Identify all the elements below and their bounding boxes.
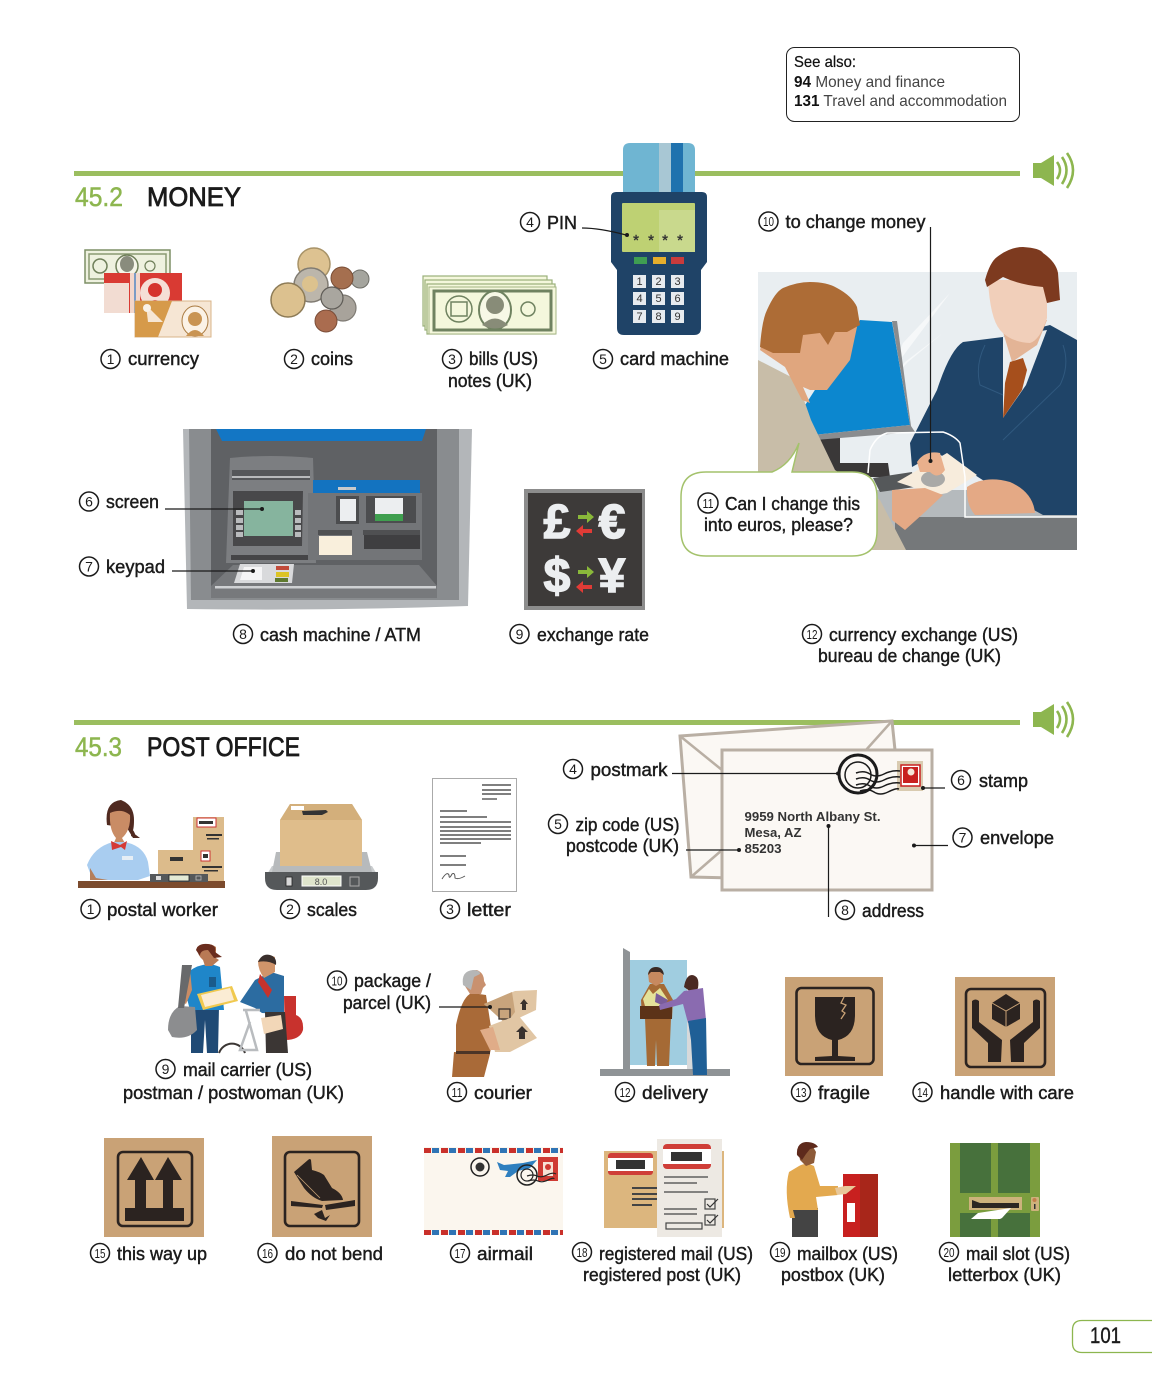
label: currency: 1	[107, 351, 115, 367]
label: courier	[448, 1082, 532, 1103]
label: airmail: airmail	[477, 1243, 533, 1264]
label: address with leader: 8	[841, 902, 849, 918]
label: zip code with leader	[548, 814, 741, 856]
label: PIN with leader: PIN	[547, 212, 577, 233]
label: bills / notes: notes (UK)	[448, 370, 532, 391]
label: registered mail / post: 18	[576, 1245, 588, 1260]
label: card machine: card machine	[620, 348, 729, 369]
label: PIN with leader	[520, 212, 629, 237]
label: mail carrier / postman	[123, 1059, 344, 1103]
label: zip code with leader: zip code (US)	[576, 814, 680, 835]
label: keypad with leader: 7	[85, 558, 93, 574]
label: package with leader: parcel (UK)	[343, 992, 431, 1013]
illustration: exchange rate sign	[524, 489, 645, 610]
heading: post office: 45.3	[75, 732, 122, 762]
illustration: card machine: 4	[636, 293, 643, 305]
label: this way up: 15	[94, 1246, 106, 1261]
page number: 101	[1090, 1323, 1121, 1348]
label: registered mail / post	[572, 1242, 753, 1285]
speech bubble	[681, 443, 877, 556]
illustration: exchange rate sign: $	[544, 550, 571, 603]
label: fragile: 13	[796, 1085, 806, 1100]
illustration: card machine: 5	[655, 293, 662, 305]
sign: fragile	[785, 977, 883, 1076]
label: exchange rate: 9	[516, 626, 524, 642]
heading: post office	[75, 732, 300, 762]
illustration: card machine: *	[648, 232, 654, 249]
label: mail carrier / postman: mail carrier (US)	[183, 1059, 312, 1080]
label: zip code with leader: postcode (UK)	[566, 835, 679, 856]
illustration: letter	[432, 778, 516, 892]
label: mail slot / letterbox: 20	[944, 1245, 954, 1260]
label: mail carrier / postman: 9	[162, 1061, 170, 1077]
label: handle with care: handle with care	[940, 1082, 1074, 1103]
see also box: See also:	[794, 54, 856, 71]
illustration: courier with parcels	[452, 970, 537, 1077]
label: envelope with leader: 7	[959, 830, 967, 846]
illustration: card machine: 1	[636, 276, 643, 288]
sign: this way up	[104, 1138, 204, 1237]
illustration: card machine: 7	[636, 311, 643, 323]
label: PIN with leader: 4	[526, 214, 534, 230]
section rule: post office	[74, 720, 1020, 725]
label: courier: 11	[452, 1085, 462, 1100]
stamp	[897, 761, 923, 791]
label: screen with leader: screen	[106, 491, 159, 512]
label: airmail	[450, 1243, 533, 1264]
label: cash machine: cash machine / ATM	[260, 624, 421, 645]
label: scales: scales	[307, 899, 357, 920]
icon: audio speaker	[1033, 153, 1073, 188]
see also box: 94 Money and finance	[794, 74, 945, 91]
illustration: card machine: 3	[674, 276, 681, 288]
illustration: coins	[271, 248, 369, 332]
address text: 85203	[744, 841, 782, 856]
label: cash machine: 8	[239, 626, 247, 642]
sign: do not bend	[272, 1136, 372, 1237]
label: postal worker: postal worker	[107, 899, 218, 920]
label: handle with care: 14	[917, 1085, 928, 1100]
label: package with leader	[328, 970, 492, 1013]
label: letter	[440, 899, 511, 920]
address text: 9959 North Albany St.	[744, 809, 880, 824]
label: mail slot / letterbox	[940, 1242, 1070, 1285]
illustration: exchange rate sign: €	[599, 496, 625, 549]
label: coins: 2	[290, 351, 298, 367]
label: package with leader: 10	[332, 974, 342, 988]
label: mail slot / letterbox: letterbox (UK)	[948, 1264, 1061, 1285]
label: courier: courier	[474, 1082, 532, 1103]
speech bubble: 11	[702, 496, 714, 511]
label: mailbox / postbox: mailbox (US)	[797, 1243, 898, 1264]
illustration: delivery	[600, 948, 730, 1076]
label: to change money: to change money	[786, 211, 926, 232]
illustration: card machine	[611, 143, 707, 335]
label: scales: 2	[286, 901, 294, 917]
label: delivery: 12	[620, 1085, 630, 1100]
illustration: envelope	[680, 721, 932, 890]
label: letter: letter	[467, 899, 511, 920]
speech bubble: into euros, please?	[704, 514, 853, 535]
label: postmark with leader: postmark	[590, 759, 668, 780]
illustration: exchange rate sign: ¥	[599, 550, 626, 603]
label: envelope with leader: envelope	[980, 827, 1054, 848]
label: to change money: 10	[763, 214, 774, 229]
label: fragile: fragile	[818, 1082, 870, 1103]
label: mailbox / postbox	[770, 1242, 898, 1285]
label: currency exchange: currency exchange (US)	[829, 624, 1018, 645]
illustration: airmail	[424, 1147, 563, 1235]
label: this way up: this way up	[117, 1243, 207, 1264]
label: address with leader	[826, 824, 924, 921]
heading: money: 45.2	[75, 182, 123, 212]
illustration: currency exchange counter	[758, 247, 1077, 550]
label: zip code with leader: 5	[554, 816, 562, 832]
illustration: card machine: 8	[655, 311, 662, 323]
label: stamp with leader: 6	[957, 772, 965, 788]
address text	[744, 809, 880, 856]
heading: money	[75, 182, 241, 212]
section rule: money	[74, 171, 1020, 176]
label: postal worker: 1	[87, 901, 95, 917]
label: delivery	[616, 1082, 709, 1103]
label: mail carrier / postman: postman / postwoman (UK)	[123, 1082, 344, 1103]
label: card machine: 5	[599, 351, 607, 367]
label: letter: 3	[446, 901, 454, 917]
label: coins	[284, 348, 353, 369]
label: bills / notes: bills (US)	[469, 348, 538, 369]
illustration: card machine: *	[662, 232, 668, 249]
illustration: scales	[265, 804, 378, 890]
see also box	[786, 48, 1020, 122]
section: post office	[74, 702, 1074, 1285]
illustration: currency notes	[85, 250, 211, 337]
illustration: scales: 8.0	[315, 877, 327, 887]
label: delivery: delivery	[642, 1082, 709, 1103]
illustration: card machine: *	[633, 232, 639, 249]
label: bills / notes: 3	[448, 351, 456, 367]
label: coins: coins	[311, 348, 353, 369]
illustration: card machine: 6	[674, 293, 681, 305]
label: registered mail / post: registered mail (US)	[599, 1243, 753, 1264]
label: package with leader: package /	[354, 970, 432, 991]
label: airmail: 17	[454, 1246, 466, 1261]
label: mailbox / postbox: 19	[774, 1245, 786, 1260]
illustration: card machine: *	[677, 232, 683, 249]
label: currency exchange	[802, 624, 1018, 666]
see also box: 131 Travel and accommodation	[794, 93, 1007, 110]
illustration: card machine: 9	[674, 311, 681, 323]
label: currency exchange: bureau de change (UK)	[818, 645, 1001, 666]
illustration: exchange rate sign: £	[544, 496, 571, 549]
label: stamp with leader	[921, 770, 1028, 791]
leader: to change money	[928, 227, 932, 463]
section: money	[74, 143, 1077, 666]
illustration: mail carriers	[168, 944, 303, 1053]
label: exchange rate: exchange rate	[537, 624, 649, 645]
illustration: mailbox	[787, 1142, 878, 1237]
label: keypad with leader	[80, 556, 255, 577]
speech bubble: Can I change this	[725, 493, 860, 514]
label: stamp with leader: stamp	[979, 770, 1028, 791]
label: currency exchange: 12	[806, 627, 818, 642]
sign: handle with care	[955, 977, 1055, 1076]
label: screen with leader	[80, 491, 264, 512]
icon: audio speaker	[1033, 702, 1073, 737]
page number	[1072, 1320, 1152, 1352]
label: envelope with leader	[912, 827, 1054, 848]
heading: post office: POST OFFICE	[147, 732, 300, 762]
illustration: card machine: 2	[655, 276, 662, 288]
illustration: registered mail	[604, 1139, 724, 1237]
illustration: postal worker	[78, 800, 225, 888]
label: keypad with leader: keypad	[106, 556, 165, 577]
label: do not bend: do not bend	[285, 1243, 383, 1264]
label: registered mail / post: registered post (UK)	[583, 1264, 741, 1285]
label: screen with leader: 6	[85, 494, 93, 510]
illustration: cash machine	[183, 429, 472, 610]
label: bills / notes	[442, 348, 538, 391]
illustration: bills	[423, 276, 556, 334]
illustration: mail slot door	[950, 1143, 1040, 1237]
address text: Mesa, AZ	[744, 825, 802, 840]
label: mailbox / postbox: postbox (UK)	[781, 1264, 885, 1285]
heading: money: MONEY	[147, 182, 241, 212]
postmark	[839, 755, 900, 794]
label: postmark with leader	[564, 759, 840, 780]
label: currency: currency	[128, 348, 200, 369]
label: scales	[280, 899, 357, 920]
label: postmark with leader: 4	[569, 761, 577, 777]
label: mail slot / letterbox: mail slot (US)	[966, 1243, 1070, 1264]
label: fragile	[792, 1082, 870, 1103]
label: do not bend: 16	[262, 1246, 273, 1261]
label: address with leader: address	[862, 900, 924, 921]
